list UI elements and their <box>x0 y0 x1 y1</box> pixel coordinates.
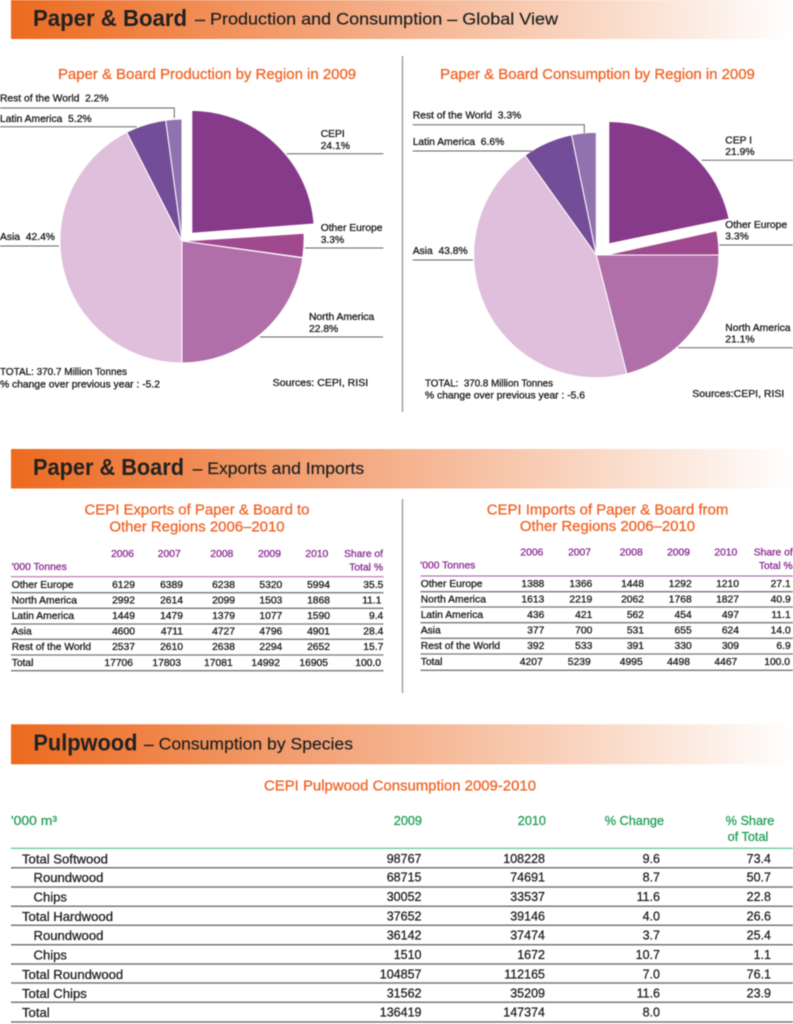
row: North America: 2614 <box>160 596 183 606</box>
table title: imports: CEPI Imports of Paper & Board from <box>487 502 728 518</box>
table title: imports: Other Regions 2006–2010 <box>520 518 695 535</box>
row: Total: 5239 <box>568 657 591 668</box>
table header: imports: 2007 <box>568 548 591 558</box>
row: Hardwood Roundwood: 3.7 <box>643 929 660 943</box>
labels: consumption: CEP I <box>725 136 752 146</box>
row: Latin America: Latin America <box>421 610 483 621</box>
table header: pulpwood: 2010 <box>518 814 546 828</box>
header: production and consumption: – Production and Consumption – Global View <box>195 10 559 28</box>
labels: consumption: 21.9% <box>725 147 755 158</box>
row: Rest of the World <box>12 642 384 653</box>
table header: pulpwood: 2009 <box>394 814 422 828</box>
row: Asia: 4796 <box>259 626 283 638</box>
labels: consumption: 21.1% <box>725 334 755 346</box>
row: Total: 136419 <box>380 1006 422 1020</box>
row: Other Europe: 27.1 <box>771 579 791 590</box>
row: Rest of the World: 15.7 <box>363 642 384 653</box>
labels: consumption: Other Europe <box>725 220 787 231</box>
row: Latin America: 1379 <box>212 611 235 622</box>
row: Other Europe: 5320 <box>259 580 283 591</box>
chart title: production: Paper & Board Production by Region in 2009 <box>58 66 356 83</box>
row: Total: 4995 <box>620 657 643 668</box>
table header: imports: 2009 <box>667 548 690 558</box>
row: Total Hardwood: Total Hardwood <box>22 909 113 924</box>
row: North America: 11.1 <box>362 596 382 606</box>
row: Total Roundwood: 7.0 <box>643 967 660 981</box>
labels: consumption: TOTAL: 370.8 Million Tonnes <box>425 378 553 390</box>
pie chart: consumption by region <box>474 122 728 378</box>
row: Latin America: 421 <box>575 610 593 621</box>
row: North America: North America <box>421 594 486 606</box>
labels: production: 22.8% <box>309 324 338 335</box>
labels: consumption: North America <box>725 323 791 334</box>
row: Total: Total <box>12 658 33 669</box>
row: Rest of the World: Rest of the World <box>12 642 91 653</box>
row: Other Europe <box>12 580 384 591</box>
labels: production: % change over previous year : -5.2 <box>0 380 160 390</box>
row: Total: 147374 <box>503 1006 545 1020</box>
row: Total: 100.0 <box>355 658 381 669</box>
row: Asia <box>12 626 384 638</box>
table header: exports: Share of <box>344 549 383 560</box>
table header: exports: Total % <box>349 562 383 573</box>
row: Rest of the World: 2537 <box>112 642 135 653</box>
row: Asia: 4711 <box>161 626 183 638</box>
table header: exports: 2009 <box>258 549 281 560</box>
header: production and consumption: Paper & Board <box>33 5 187 31</box>
header: exports and imports: – Exports and Imports <box>193 459 364 478</box>
row: North America: 2992 <box>112 596 135 606</box>
panel: pulpwood table <box>11 778 793 1022</box>
labels: consumption: Asia 43.8% <box>413 246 468 257</box>
table header: exports: '000 Tonnes <box>12 562 67 573</box>
row: Total Softwood: 9.6 <box>643 852 660 866</box>
row: Total Hardwood: 26.6 <box>747 910 771 924</box>
row: Other Europe: 1210 <box>716 579 739 590</box>
row: Total Chips: 23.9 <box>747 987 771 1001</box>
table header: pulpwood: '000 m³ <box>11 814 57 828</box>
row: Asia: 624 <box>722 626 739 636</box>
row: Total <box>12 658 381 669</box>
row: Other Europe: 6129 <box>112 580 135 591</box>
row: Total: 4467 <box>714 657 738 668</box>
labels: consumption: Sources:CEPI, RISI <box>692 389 784 400</box>
row: Asia: 531 <box>627 626 644 636</box>
panel: imports table <box>420 502 793 670</box>
row: Hardwood Roundwood: 25.4 <box>747 929 771 943</box>
row: Other Europe: Other Europe <box>421 579 483 590</box>
row: Asia: 28.4 <box>363 626 384 638</box>
row: Total Softwood: Total Softwood <box>22 852 108 866</box>
row: Rest of the World: 6.9 <box>776 641 791 652</box>
row: Rest of the World: 330 <box>675 641 692 652</box>
row: Latin America: 1449 <box>112 611 135 622</box>
labels: production: CEPI <box>321 129 345 140</box>
table header: exports: 2007 <box>158 549 181 560</box>
row: Hardwood Roundwood: Roundwood <box>34 928 103 943</box>
row: Hardwood Roundwood: 37474 <box>510 929 545 943</box>
row: Asia: 4600 <box>112 626 135 638</box>
row: Rest of the World: 2610 <box>160 642 183 653</box>
row: Other Europe: 6389 <box>160 580 183 591</box>
row: Softwood Chips: Chips <box>34 890 67 904</box>
row: Rest of the World: 392 <box>527 641 545 652</box>
row: Asia: Asia <box>12 626 32 638</box>
row: Other Europe <box>421 579 791 590</box>
row: North America: 40.9 <box>771 594 791 606</box>
row: Asia: 700 <box>575 626 593 636</box>
row: Hardwood Chips: 1672 <box>517 948 545 962</box>
labels: production <box>0 94 383 390</box>
row: Latin America: 1590 <box>307 611 330 622</box>
labels: production: 24.1% <box>321 141 350 152</box>
table title: exports <box>84 502 310 536</box>
header: production and consumption <box>11 0 793 39</box>
row: Total Softwood: 73.4 <box>747 852 771 866</box>
row: Total Chips: Total Chips <box>22 986 87 1001</box>
labels: production: Rest of the World 2.2% <box>0 94 109 104</box>
table header: exports: 2010 <box>305 549 329 560</box>
row: Rest of the World: 2638 <box>212 642 235 653</box>
row: Total Hardwood: 39146 <box>510 910 545 924</box>
row: Softwood Chips: 22.8 <box>747 890 771 904</box>
row: Softwood Roundwood <box>34 870 771 885</box>
row: Other Europe: 6238 <box>212 580 235 591</box>
labels: consumption: 3.3% <box>725 232 749 242</box>
row: Latin America: 9.4 <box>369 611 384 622</box>
row: Total: 100.0 <box>764 657 790 668</box>
row: Total Softwood: 98767 <box>387 852 422 866</box>
table header: pulpwood <box>11 814 774 844</box>
row: North America: 2099 <box>212 596 235 606</box>
row: Softwood Chips: 33537 <box>510 890 545 904</box>
row: North America: 1613 <box>521 594 545 606</box>
row: Total: 17706 <box>104 658 133 669</box>
row: Rest of the World: 533 <box>575 641 593 652</box>
row: Total <box>22 1005 660 1020</box>
row: Latin America: Latin America <box>12 611 74 622</box>
row: Total Hardwood <box>22 909 771 924</box>
row: Total Roundwood: 76.1 <box>747 967 771 981</box>
table header: imports <box>420 548 793 572</box>
row: Softwood Roundwood: 74691 <box>510 871 545 885</box>
labels: production: North America <box>309 312 375 323</box>
row: Total: Total <box>22 1005 50 1020</box>
row: Latin America: 1479 <box>160 611 183 622</box>
row: Total Roundwood: 104857 <box>380 967 422 981</box>
panel: consumption pie <box>413 66 793 402</box>
row: Softwood Chips: 30052 <box>387 890 422 904</box>
labels: production: Sources: CEPI, RISI <box>273 378 368 389</box>
labels: consumption: Rest of the World 3.3% <box>413 110 521 122</box>
row: North America: 2219 <box>569 594 593 606</box>
row: Total: 17803 <box>152 658 181 669</box>
table header: pulpwood: % Share <box>726 814 774 828</box>
row: North America: 1768 <box>669 594 692 606</box>
row: Softwood Roundwood: 68715 <box>387 871 422 885</box>
row: Hardwood Chips: 1.1 <box>754 948 771 962</box>
row: Total: Total <box>421 657 442 668</box>
header: exports and imports: Paper & Board <box>33 454 184 480</box>
table header: pulpwood: of Total <box>728 830 768 844</box>
row: North America: 1827 <box>716 594 739 606</box>
row: Total: 4498 <box>667 657 690 668</box>
table title: pulpwood: CEPI Pulpwood Consumption 2009-2010 <box>264 778 536 794</box>
labels: production: Latin America 5.2% <box>0 114 92 125</box>
row: Rest of the World: 391 <box>627 641 644 652</box>
row: Asia: Asia <box>421 626 441 636</box>
labels: production: 3.3% <box>321 235 344 246</box>
row: Hardwood Chips <box>34 948 771 962</box>
labels: consumption: Latin America 6.6% <box>413 137 504 148</box>
row: Asia: 14.0 <box>771 626 791 636</box>
row: Total Hardwood: 4.0 <box>643 910 660 924</box>
row: Latin America: 11.1 <box>771 610 791 621</box>
row: Asia: 377 <box>527 626 545 636</box>
row: Total Softwood <box>22 852 771 866</box>
row: Hardwood Chips: 10.7 <box>636 948 660 962</box>
row: Total Hardwood: 37652 <box>387 910 422 924</box>
leader lines: consumption <box>413 125 793 348</box>
row: Rest of the World: Rest of the World <box>421 641 500 652</box>
table header: imports: 2006 <box>520 548 544 558</box>
row: Total: 8.0 <box>643 1006 660 1020</box>
row: Other Europe: Other Europe <box>12 580 74 591</box>
table header: imports: 2008 <box>620 548 643 558</box>
table title: exports: CEPI Exports of Paper & Board to <box>84 502 310 518</box>
labels: production: Asia 42.4% <box>0 232 55 243</box>
row: Asia <box>421 626 791 636</box>
row: Asia: 655 <box>675 626 692 636</box>
row: Hardwood Chips: Chips <box>34 948 67 962</box>
row: Other Europe: 35.5 <box>363 580 384 591</box>
table header: imports: '000 Tonnes <box>420 560 475 572</box>
table header: imports: Share of <box>754 548 793 558</box>
row: Other Europe: 1366 <box>569 579 593 590</box>
table header: exports: 2008 <box>210 549 234 560</box>
row: Total Chips: 35209 <box>510 987 545 1001</box>
row: Softwood Roundwood: 8.7 <box>643 871 660 885</box>
row: Latin America: 562 <box>627 610 644 621</box>
row: Total Roundwood: Total Roundwood <box>22 967 123 982</box>
row: Other Europe: 5994 <box>307 580 330 591</box>
row: Total Roundwood <box>22 967 771 982</box>
table header: imports: Total % <box>759 561 793 572</box>
row: Latin America: 454 <box>675 610 692 621</box>
row: North America: 2062 <box>621 594 644 606</box>
row: Asia: 4901 <box>307 626 330 638</box>
row: North America <box>421 594 791 606</box>
table title: exports: Other Regions 2006–2010 <box>109 518 285 536</box>
row: Hardwood Chips: 1510 <box>394 948 422 962</box>
row: Softwood Chips <box>34 890 771 904</box>
row: Other Europe: 1448 <box>621 579 644 590</box>
labels: consumption: % change over previous year : -5.6 <box>425 390 585 402</box>
row: Rest of the World <box>421 641 791 652</box>
row: North America: 1503 <box>259 596 283 606</box>
row: Total Chips: 11.6 <box>637 987 660 1001</box>
row: Latin America: 497 <box>722 610 739 621</box>
row: Asia: 4727 <box>212 626 235 638</box>
row: Total Chips: 31562 <box>387 987 422 1001</box>
row: Rest of the World: 309 <box>722 641 739 652</box>
row: Hardwood Roundwood: 36142 <box>387 929 422 943</box>
row: Total: 14992 <box>251 658 280 669</box>
row: Hardwood Roundwood <box>34 928 771 943</box>
row: Total Roundwood: 112165 <box>504 967 545 981</box>
header: pulpwood: Pulpwood <box>33 730 137 756</box>
pie chart: production by region <box>60 111 314 363</box>
row: Total <box>421 657 790 668</box>
row: Other Europe: 1292 <box>669 579 692 590</box>
row: Latin America <box>421 610 791 621</box>
row: Latin America: 436 <box>527 610 545 621</box>
row: Total: 17081 <box>204 658 233 669</box>
row: North America <box>12 596 382 606</box>
row: Total: 16905 <box>299 658 328 669</box>
labels: consumption <box>413 110 791 402</box>
table header: exports <box>12 549 383 573</box>
row: Total: 4207 <box>520 657 543 668</box>
row: Softwood Roundwood: Roundwood <box>34 870 103 885</box>
row: North America: North America <box>12 596 77 606</box>
row: Rest of the World: 2652 <box>307 642 330 653</box>
leader lines: production <box>0 108 383 337</box>
table header: imports: 2010 <box>714 548 738 558</box>
row: Total Softwood: 108228 <box>503 852 545 866</box>
labels: production: TOTAL: 370.7 Million Tonnes <box>0 367 127 378</box>
panel: production pie <box>0 66 383 390</box>
row: Softwood Roundwood: 50.7 <box>747 871 771 885</box>
chart title: consumption: Paper & Board Consumption by Region in 2009 <box>440 66 755 83</box>
header: pulpwood: – Consumption by Species <box>144 734 353 754</box>
table title: imports <box>487 502 728 535</box>
row: Latin America <box>12 611 384 622</box>
table header: exports: 2006 <box>111 549 134 560</box>
labels: production: Other Europe <box>321 223 383 234</box>
header: exports and imports <box>11 449 793 488</box>
row: North America: 1868 <box>307 596 330 606</box>
row: Softwood Chips: 11.6 <box>637 890 660 904</box>
row: Latin America: 1077 <box>259 611 283 622</box>
panel: exports table <box>11 502 384 671</box>
row: Total Chips <box>22 986 771 1001</box>
header: pulpwood <box>11 724 793 764</box>
table header: pulpwood: % Change <box>605 814 664 828</box>
row: Other Europe: 1388 <box>521 579 545 590</box>
row: Rest of the World: 2294 <box>259 642 283 653</box>
